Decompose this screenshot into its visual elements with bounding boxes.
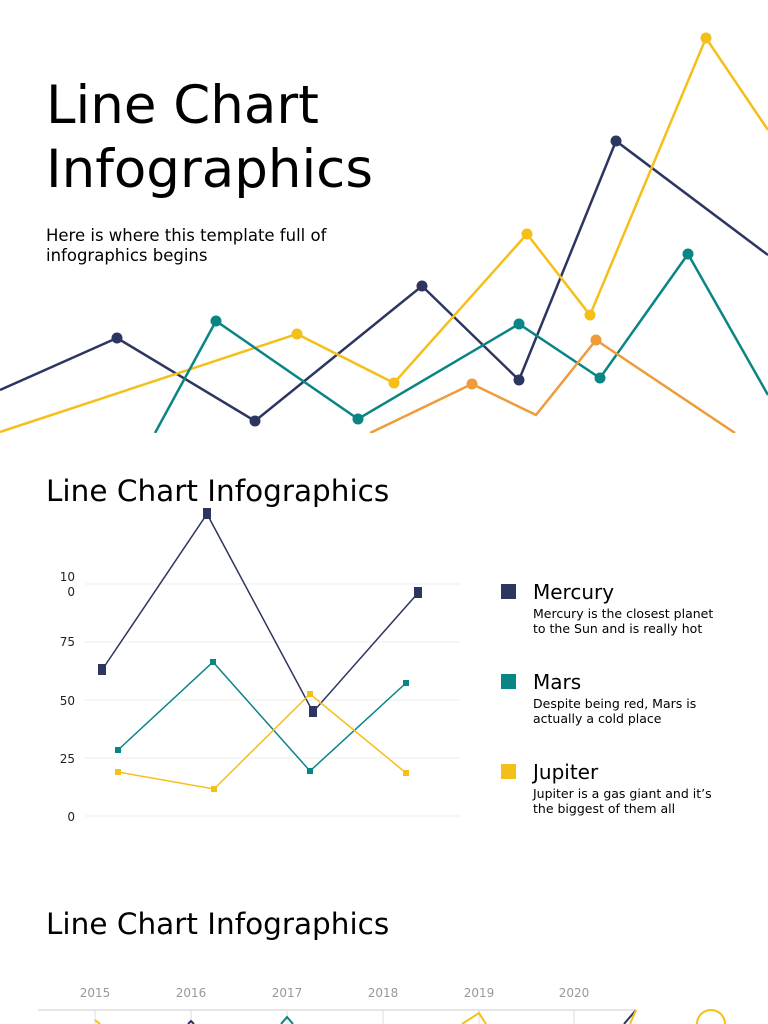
timeline chart [38, 986, 726, 1024]
timeline chart: 2019 [464, 986, 494, 1000]
legend: Mercury: Mercury is the closest planet to the Sun and is really hot [533, 606, 713, 636]
legend: Mercury: Mercury [533, 580, 614, 604]
chart 2 [60, 508, 460, 824]
timeline chart: 2018 [368, 986, 398, 1000]
timeline chart: 2016 [176, 986, 206, 1000]
title: Infographics [46, 139, 373, 200]
subtitle: Here is where this template full of [46, 226, 326, 245]
subtitle: infographics begins [46, 246, 207, 265]
subtitle [46, 226, 327, 265]
legend: Mars [501, 670, 696, 726]
chart 2: 25 [60, 752, 75, 766]
legend: Jupiter [501, 760, 712, 816]
timeline chart: 2020 [559, 986, 589, 1000]
chart 2: 10 [60, 570, 75, 584]
title [46, 75, 373, 200]
heading 2: Line Chart Infographics [46, 474, 389, 508]
chart 2: 50 [60, 694, 75, 708]
title: Line Chart [46, 75, 319, 136]
legend: Jupiter: Jupiter [533, 760, 598, 784]
legend: Mars: Mars [533, 670, 581, 694]
legend: Jupiter: Jupiter is a gas giant and it’s the biggest of them all [533, 786, 712, 816]
heading 3: Line Chart Infographics [46, 907, 389, 941]
chart 2: 75 [60, 635, 75, 649]
legend: Mercury [501, 580, 713, 636]
chart 2: 0 [67, 585, 75, 599]
timeline chart: 2015 [80, 986, 110, 1000]
top line chart [0, 32, 768, 433]
timeline chart: 2017 [272, 986, 302, 1000]
legend: Mars: Despite being red, Mars is actually a cold place [533, 696, 696, 726]
chart 2: 0 [67, 810, 75, 824]
